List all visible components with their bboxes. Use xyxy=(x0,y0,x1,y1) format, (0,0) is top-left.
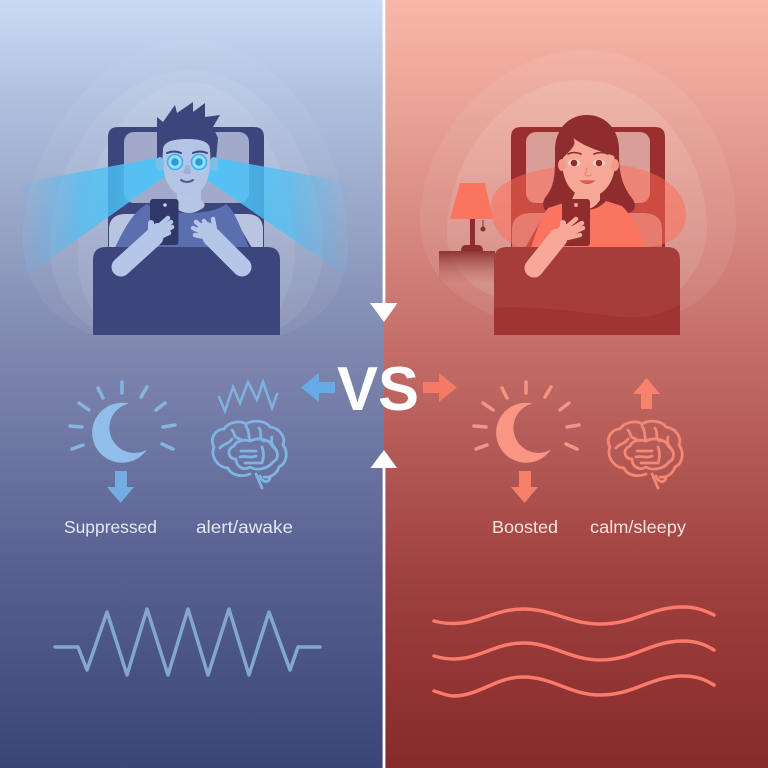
hair xyxy=(157,102,220,162)
table lamp xyxy=(450,183,493,251)
blanket shadow fold xyxy=(494,305,680,335)
lower pillows xyxy=(512,213,662,248)
label: Suppressed: Suppressed xyxy=(64,517,157,537)
ears xyxy=(156,157,218,171)
ears xyxy=(558,159,619,171)
chart: jagged high-activity brainwave xyxy=(55,609,320,675)
eyebrows xyxy=(167,152,207,153)
neck xyxy=(173,186,205,213)
chart: smooth calm brainwaves xyxy=(434,607,714,696)
nose and mouth xyxy=(581,168,594,184)
headboard xyxy=(108,127,264,250)
face xyxy=(562,138,615,197)
icon: moon with rays, warm xyxy=(474,382,579,463)
blue light beam left xyxy=(20,157,170,280)
arm and hand holding phone xyxy=(534,219,583,268)
nose and mouth xyxy=(181,165,193,182)
divider: top line with down arrow xyxy=(370,0,398,322)
arrow: melatonin down, blue xyxy=(107,471,134,503)
pillow xyxy=(124,132,249,203)
divider: bottom line with up arrow xyxy=(370,450,397,768)
blue light beam right xyxy=(197,157,352,280)
icon: brain, blue xyxy=(212,421,286,488)
illustration: man in bed with phone xyxy=(20,102,352,335)
neck xyxy=(570,188,600,209)
icon: jagged activity above brain xyxy=(219,382,277,411)
title: VS: VS xyxy=(337,355,419,424)
nightstand xyxy=(439,251,495,283)
icon: brain, warm xyxy=(608,421,682,488)
glowing eyes xyxy=(168,154,206,170)
shirt xyxy=(530,201,646,250)
arrow: pointing right xyxy=(423,373,457,402)
lower pillows xyxy=(109,214,263,248)
arrow: pointing left xyxy=(301,373,335,402)
warm light glow xyxy=(491,163,686,247)
arm and free hand xyxy=(193,219,242,267)
panel: blue light background xyxy=(0,0,384,768)
arrow: up, warm xyxy=(633,378,660,409)
blanket xyxy=(93,247,280,335)
glow: warm side halo xyxy=(420,50,736,318)
label: Boosted: Boosted xyxy=(492,517,558,537)
glow: blue side halo xyxy=(23,40,348,335)
headboard xyxy=(511,127,665,250)
long hair xyxy=(543,115,635,213)
illustration: woman in bed with phone under warm lamp xyxy=(439,115,686,335)
label: calm/sleepy: calm/sleepy xyxy=(590,517,686,537)
eyes xyxy=(568,159,605,167)
label: alert/awake: alert/awake xyxy=(196,517,293,537)
arm and hand holding phone xyxy=(121,218,172,267)
phone xyxy=(150,199,178,245)
shirt xyxy=(112,204,252,254)
blanket xyxy=(494,247,680,335)
phone xyxy=(562,199,590,246)
icon: moon with rays, blue xyxy=(70,382,175,463)
pillow xyxy=(526,132,650,203)
face xyxy=(163,139,210,196)
arrow: melatonin down, warm xyxy=(511,471,538,503)
panel: warm light background xyxy=(384,0,768,768)
eyebrows xyxy=(568,152,608,154)
